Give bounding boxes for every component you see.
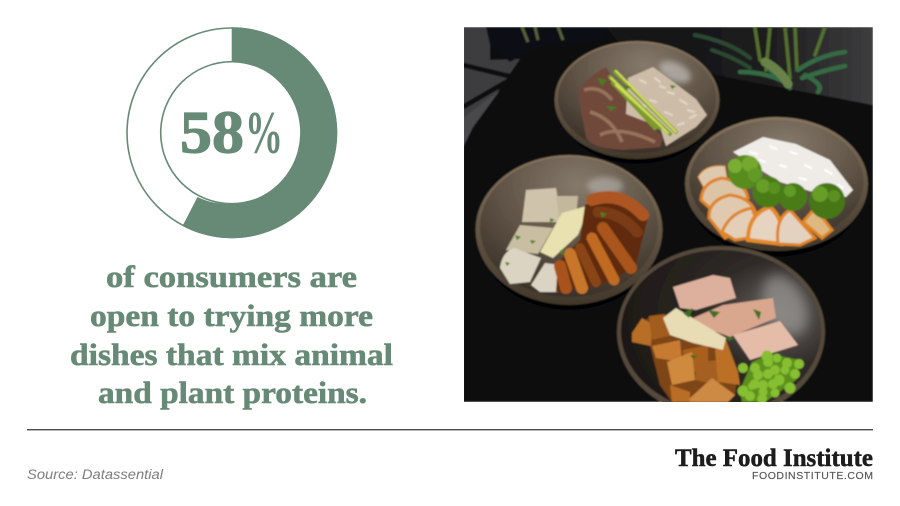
bowl: beef, asparagus and rice — [554, 41, 720, 164]
sweet potato wedges — [556, 197, 648, 292]
bowl: chicken, broccoli and rice — [685, 117, 868, 257]
logo: The Food Institute: The Food Institute — [675, 445, 873, 472]
divider — [27, 429, 873, 430]
salmon fillets — [673, 275, 798, 360]
donut value: 58 — [180, 100, 244, 166]
bowl: salmon, potatoes and edamame — [617, 246, 825, 418]
statement text: of consumers are — [106, 259, 357, 294]
edamame — [738, 350, 804, 404]
statement text — [70, 259, 393, 410]
source note: Source: Datassential — [27, 467, 164, 482]
potted plant top left — [486, 27, 606, 62]
donut value: % — [245, 100, 283, 166]
tofu pieces — [500, 188, 590, 292]
logo url: FOODINSTITUTE.COM — [752, 470, 873, 482]
plant top right — [695, 27, 845, 92]
floor and table edge — [463, 27, 873, 147]
bowl: tofu and sweet potato wedges — [476, 155, 662, 310]
statement text: open to trying more — [90, 298, 373, 333]
donut chart: 58% — [127, 27, 337, 238]
photo: four food bowls on a dark table — [463, 27, 873, 418]
statement text: and plant proteins. — [98, 375, 367, 410]
potato slice — [663, 308, 726, 350]
chicken slices — [698, 166, 832, 245]
roasted potato cubes — [632, 314, 740, 402]
broccoli — [728, 155, 845, 219]
donut value — [180, 100, 283, 166]
statement text: dishes that mix animal — [70, 337, 393, 372]
